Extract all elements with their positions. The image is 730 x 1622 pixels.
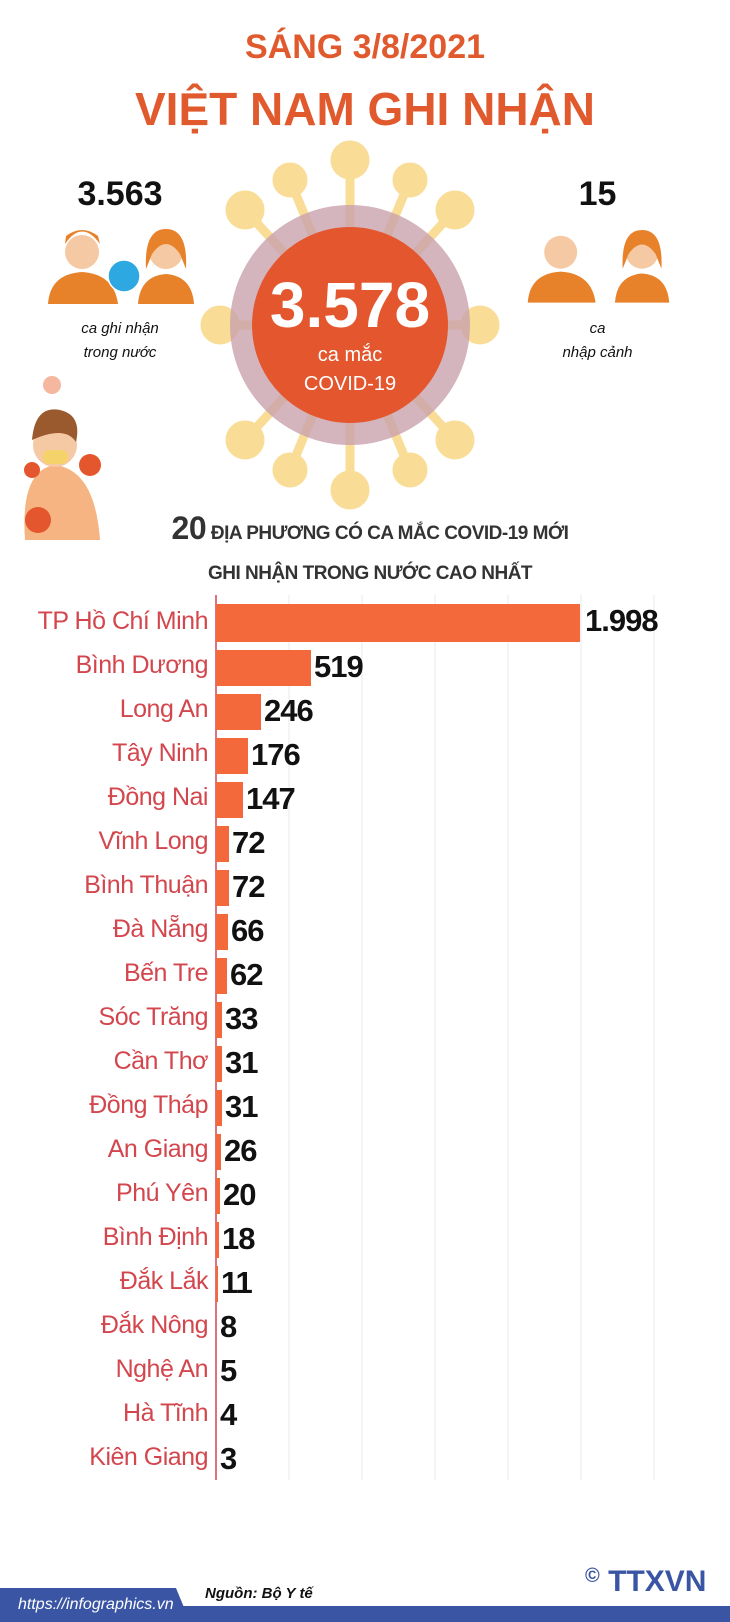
- stat: imported: [528, 175, 670, 361]
- main number: COVID-19: [304, 373, 396, 395]
- text: Tây Ninh: [112, 739, 208, 767]
- stat: imported: ca: [590, 320, 605, 337]
- text: 5: [220, 1353, 236, 1388]
- bar chart: [215, 595, 654, 1480]
- title: date: SÁNG 3/8/2021: [245, 28, 485, 66]
- chart title: 20 ĐỊA PHƯƠNG CÓ CA MẮC COVID-19 MỚI: [172, 510, 568, 546]
- text: 62: [230, 957, 262, 992]
- icon: people with globe: [48, 229, 194, 304]
- text: 20: [223, 1177, 255, 1212]
- virus illustration: [200, 140, 500, 510]
- text: Vĩnh Long: [98, 827, 208, 855]
- text: 31: [225, 1045, 257, 1080]
- text: Đắk Lắk: [120, 1267, 208, 1295]
- values: 1.998: [585, 603, 658, 638]
- text: Đắk Nông: [101, 1311, 208, 1339]
- main number: [270, 269, 430, 395]
- text: 31: [225, 1089, 257, 1124]
- text: Bình Dương: [76, 651, 208, 679]
- icon: sick person: [24, 376, 101, 540]
- stat: imported: nhập cảnh: [562, 344, 633, 361]
- text: Long An: [120, 695, 208, 723]
- text: 11: [221, 1265, 252, 1300]
- text: 33: [225, 1001, 257, 1036]
- text: 147: [246, 781, 295, 816]
- stat: domestic: ca ghi nhận: [81, 320, 159, 337]
- logo: TTXVN: © TTXVN: [585, 1565, 706, 1598]
- text: 26: [224, 1133, 256, 1168]
- text: Đà Nẵng: [113, 915, 208, 943]
- main number: 3.578: [270, 269, 430, 341]
- text: Hà Tĩnh: [123, 1399, 208, 1427]
- text: 3: [220, 1441, 236, 1476]
- text: Nghệ An: [116, 1355, 208, 1383]
- chart title: [172, 510, 568, 584]
- text: Đồng Tháp: [89, 1091, 208, 1119]
- text: 4: [220, 1397, 236, 1432]
- text: 72: [232, 869, 264, 904]
- text: Sóc Trăng: [99, 1003, 208, 1031]
- text: 8: [220, 1309, 236, 1344]
- text: Bến Tre: [124, 959, 208, 987]
- text: Đồng Nai: [108, 783, 208, 811]
- text: Bình Thuận: [84, 871, 208, 899]
- source: Nguồn: Bộ Y tế: [205, 1585, 313, 1602]
- text: Bình Định: [103, 1223, 208, 1251]
- text: 246: [264, 693, 313, 728]
- text: An Giang: [108, 1135, 208, 1163]
- text: 176: [251, 737, 300, 772]
- text: Cần Thơ: [114, 1047, 208, 1075]
- row labels: TP Hồ Chí Minh: [38, 607, 208, 635]
- footer url tab: https://infographics.vn: [18, 1596, 174, 1613]
- bars: [216, 604, 580, 642]
- text: 18: [222, 1221, 254, 1256]
- text: 519: [314, 649, 363, 684]
- stat: imported: 15: [579, 175, 616, 213]
- text: 66: [231, 913, 263, 948]
- footer url tab: [0, 1588, 184, 1612]
- stat: domestic: trong nước: [84, 344, 156, 361]
- chart title: GHI NHẬN TRONG NƯỚC CAO NHẤT: [208, 563, 532, 584]
- stat: domestic: 3.563: [77, 175, 163, 213]
- title: main: VIỆT NAM GHI NHẬN: [135, 83, 595, 135]
- footer bar: [0, 1606, 730, 1622]
- text: 72: [232, 825, 264, 860]
- icon: people: [528, 230, 670, 303]
- main number: ca mắc: [318, 344, 382, 366]
- text: Kiên Giang: [89, 1443, 208, 1471]
- stat: domestic: [48, 175, 194, 361]
- text: Phú Yên: [116, 1179, 208, 1207]
